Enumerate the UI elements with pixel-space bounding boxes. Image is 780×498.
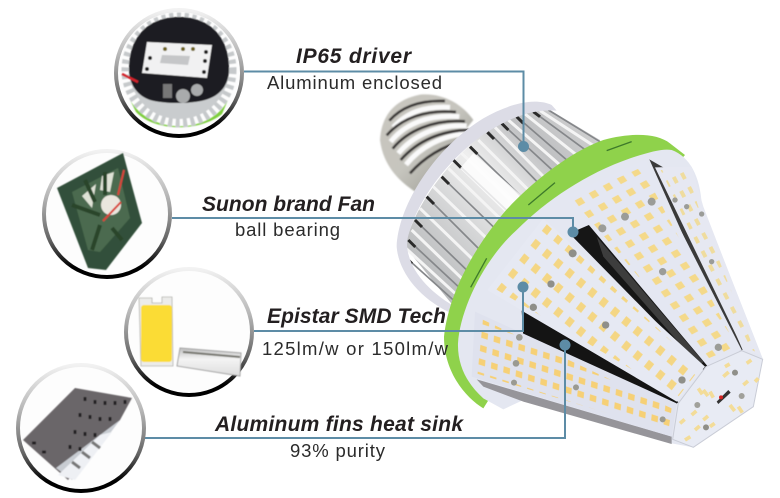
text: efficacy: 125lm/w or 150lm/w	[262, 338, 449, 359]
front aluminium face plate	[458, 150, 763, 447]
heading: Epistar SMD Tech: Epistar SMD Tech	[267, 305, 446, 328]
screw base	[380, 94, 473, 192]
icon circle: fan	[44, 151, 170, 277]
connector line: IP65 driver	[244, 72, 524, 146]
silver lower edge of fin	[477, 379, 672, 444]
LED strip: centre	[487, 218, 705, 402]
heading: IP65 driver: IP65 driver	[296, 45, 413, 68]
connector line: fan	[172, 218, 573, 232]
icon circle: SMD chip	[126, 269, 252, 395]
LED strip: far right	[655, 167, 761, 355]
text: ball bearing: ball bearing	[235, 219, 340, 240]
text: 93% purity: 93% purity	[290, 440, 386, 461]
dot: SMD	[518, 282, 528, 292]
icon circle: heat sink	[18, 365, 144, 491]
icon circle: driver	[116, 10, 242, 136]
dot: fan	[568, 226, 578, 238]
aluminium fin body	[405, 110, 600, 310]
white collar disc	[397, 102, 557, 313]
green ring	[444, 135, 685, 408]
text: Aluminum enclosed: Aluminum enclosed	[267, 72, 442, 93]
dot: IP65 driver	[518, 141, 529, 152]
dot: heat sink	[560, 340, 570, 350]
connector line: SMD	[254, 287, 523, 331]
connector line: heat sink	[143, 345, 565, 438]
end cap with LEDs	[673, 351, 763, 447]
LED strip: top	[565, 160, 742, 365]
heading: Aluminum fins heat sink: Aluminum fins heat sink	[214, 413, 464, 436]
LED strip: lower left	[472, 312, 677, 437]
dark gaps between LED strips	[522, 159, 743, 405]
LED corn bulb product	[380, 94, 763, 447]
heading: Sunon brand Fan: Sunon brand Fan	[202, 193, 375, 216]
